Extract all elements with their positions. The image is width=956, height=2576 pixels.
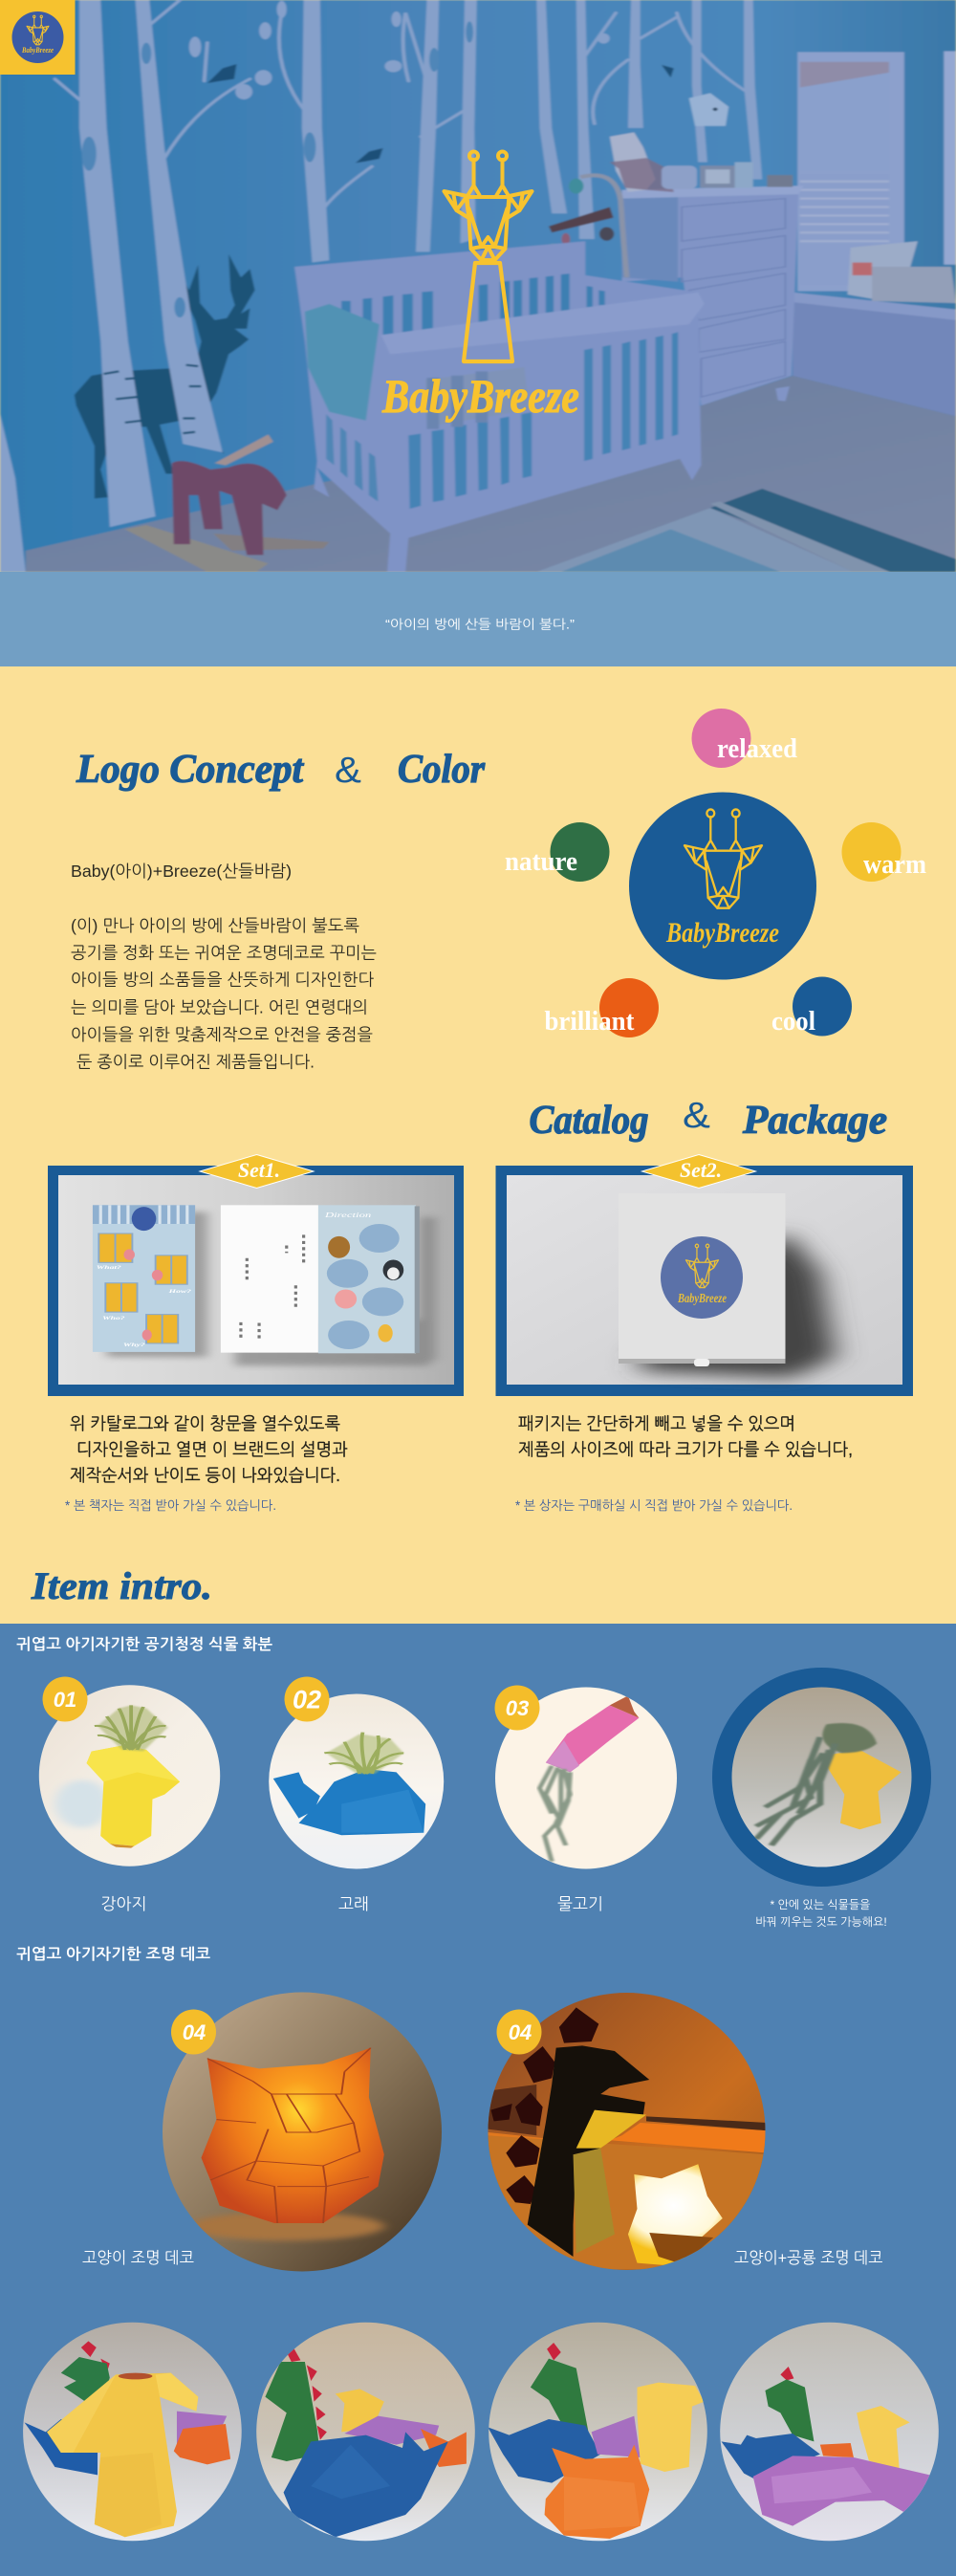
center logo circle [629,792,816,979]
open catalog spread: Direction [324,1212,371,1219]
logo concept text: 둔 종이로 이루어진 제품들입니다. [76,1052,315,1071]
badge 03 [495,1685,539,1731]
window seat and pillows [793,241,956,416]
color dots [551,709,901,1037]
color labels: cool [771,1007,815,1037]
top-left logo badge [0,0,75,75]
catalog cover: Who? [102,1315,125,1321]
badge 04 dino lamp: 04 [509,2020,532,2044]
heading: Catalog & Package: & [683,1096,710,1136]
catalog shadows [107,1212,436,1365]
logo concept text [71,862,377,1071]
product 03 fish pot [495,1687,677,1868]
panel: package mockup [495,1166,913,1396]
logo concept text: 공기를 정화 또는 귀여운 조명데코로 꾸미는 [71,943,377,962]
logo concept text: 아이들 방의 소품들을 산뜻하게 디자인한다 [71,970,374,989]
package description [518,1414,853,1459]
dino and cat lamp photo [488,1993,769,2270]
shelf toys: fox, frame, birdhouse [610,93,793,192]
deer silhouette [75,254,255,498]
color diagram [505,709,926,1037]
logo concept text: Baby(아이)+Breeze(산들바람) [71,862,292,881]
heading: plant pots: 귀엽고 아기자기한 공기청정 식물 화분 [16,1636,272,1653]
group photo 1: dog in front [23,2323,242,2541]
catalog note: * 본 책자는 직접 받아 가실 수 있습니다. [65,1498,276,1513]
heading: Logo Concept & Color: Color [398,748,486,792]
product labels: 물고기 [557,1895,603,1913]
tagline band [0,572,956,666]
floor [26,376,956,572]
group photo 2: whale in front [256,2323,475,2541]
box shadow [641,1231,836,1378]
catalog cover: How? [167,1288,191,1294]
catalog cover: What? [97,1264,121,1271]
box logo sticker [661,1236,743,1319]
set 1 badge: Set1. [238,1158,280,1182]
center logo circle: BabyBreeze [665,917,779,949]
color labels: relaxed [717,734,797,764]
hero logo: giraffe and BabyBreeze wordmark: BabyBreeze [381,369,579,423]
badge 02: 02 [293,1685,321,1714]
mobile [545,175,627,277]
product dog pot with moss, blue ring [712,1668,931,1887]
window [797,52,956,291]
logo concept text: (이) 만나 아이의 방에 산들바람이 불도록 [71,916,359,935]
color labels: brilliant [545,1007,635,1037]
badge 04 cat lamp: 04 [183,2020,206,2044]
heading: Logo Concept & Color: Logo Concept [76,748,304,792]
box [619,1193,786,1364]
set 2 badge: Set2. [680,1158,722,1182]
badge 01: 01 [54,1688,76,1712]
badge 01 [42,1677,88,1721]
color labels [505,734,926,1037]
rug [536,489,956,572]
logo concept text: 아이들을 위한 맞춤제작으로 안전을 중점을 [71,1025,373,1044]
catalog description: 디자인을하고 열면 이 브랜드의 설명과 [76,1440,348,1459]
group photo 3: cat in front [488,2323,707,2541]
moose toy [125,434,329,572]
group photo 4: fish in front [720,2323,939,2541]
badge 04 dino lamp [497,2010,541,2054]
note under ring: 바꿔 끼우는 것도 가능해요! [755,1915,887,1929]
product labels: 고래 [338,1895,369,1913]
product 01 dog pot [39,1685,220,1867]
badge 02 [285,1677,329,1721]
logo concept text: 는 의미를 담아 보았습니다. 어린 연령대의 [71,998,368,1017]
heading: Catalog & Package [530,1096,887,1143]
cat lamp photo [163,1993,442,2272]
package description: 제품의 사이즈에 따라 크기가 다를 수 있습니다, [518,1440,853,1459]
set 2 badge [642,1155,755,1188]
tagline band: “아이의 방에 산들 바람이 불다.” [385,618,575,631]
lamp labels: 고양이+공룡 조명 데코 [734,2249,883,2267]
heading: Catalog & Package: Catalog [530,1099,648,1143]
crib [294,241,705,572]
package note: * 본 상자는 구매하실 시 직접 받아 가실 수 있습니다. [515,1498,793,1513]
hero photo: nursery room [0,0,956,572]
product 02 whale pot [269,1694,444,1868]
note under ring: * 안에 있는 식물들을 [771,1898,870,1911]
heading: Catalog & Package: Package [742,1099,887,1143]
catalog cover: Why? [123,1342,145,1347]
hero logo: giraffe and BabyBreeze wordmark [381,151,579,423]
color labels: warm [863,850,926,880]
heading: lighting decor: 귀엽고 아기자기한 조명 데코 [16,1946,210,1963]
blanket [305,304,380,421]
open catalog spread [221,1205,420,1353]
badge 04 cat lamp [171,2010,216,2054]
package description: 패키지는 간단하게 빼고 넣을 수 있으며 [518,1414,795,1433]
heading: Logo Concept & Color: & [335,751,361,791]
birds [207,64,674,164]
heading: Logo Concept & Color [76,748,486,792]
badge 03: 03 [506,1696,529,1720]
note under ring [755,1898,887,1929]
lamp labels: 고양이 조명 데코 [82,2249,194,2267]
catalog description: 제작순서와 난이도 등이 나와있습니다. [70,1466,340,1485]
box logo sticker: BabyBreeze [677,1292,727,1306]
heading: Item intro: Item intro. [31,1564,212,1607]
color labels: nature [505,847,577,877]
blue products section background [0,1624,956,2576]
catalog description: 위 카탈로그와 같이 창문을 열수있도록 [70,1414,340,1433]
product labels: 강아지 [101,1895,146,1913]
set 1 badge [200,1155,314,1188]
catalog description [70,1414,348,1485]
lamp labels [82,2249,883,2267]
catalog cover [93,1205,195,1352]
dresser [622,186,804,405]
panel: catalog mockup [48,1166,464,1396]
product labels [101,1895,603,1913]
top-left logo badge: BabyBreeze [21,46,54,55]
